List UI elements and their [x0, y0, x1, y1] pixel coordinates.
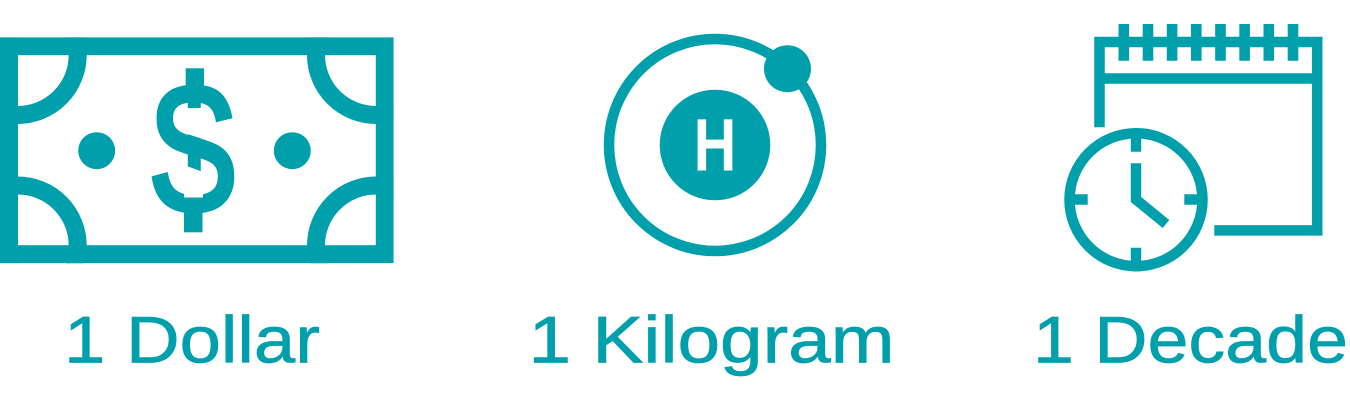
- label: 1 Kilogram: 1 Kilogram: [528, 303, 894, 377]
- atom symbol H: H: [694, 104, 736, 187]
- icon: dollar sign: $: [152, 46, 235, 252]
- label: 1 Decade: 1 Decade: [1033, 303, 1348, 377]
- icon: hydrogen atom: [609, 39, 821, 251]
- icon: calendar with clock: [1070, 24, 1317, 266]
- label: 1 Dollar: 1 Dollar: [64, 303, 320, 377]
- icon: dollar bill: [0, 0, 1350, 323]
